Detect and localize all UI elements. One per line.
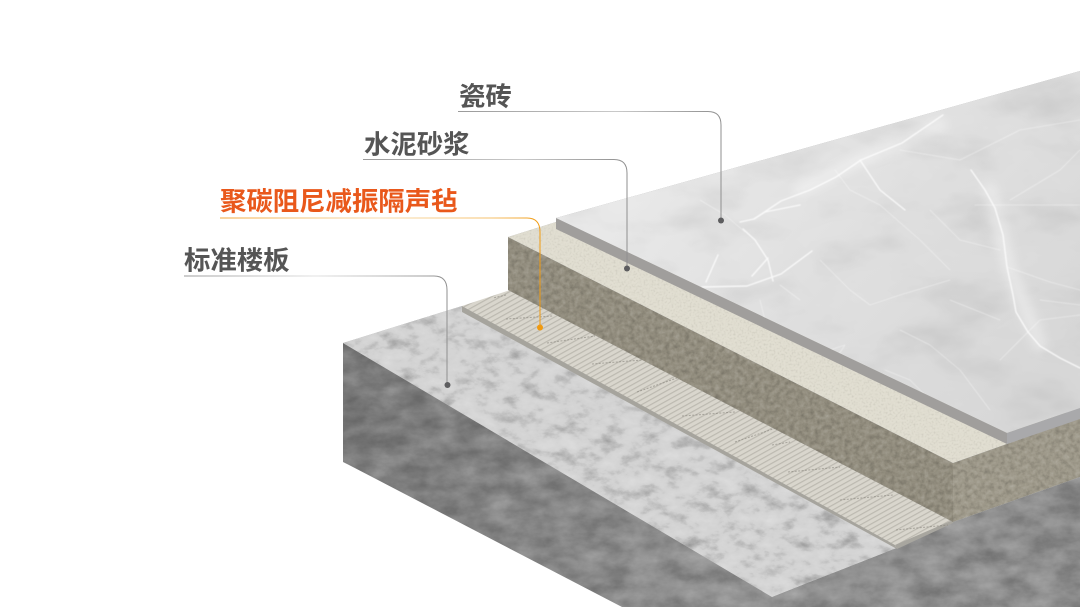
mortar front face (508, 237, 953, 522)
felt printed marks (493, 295, 948, 530)
concrete slab: standard floor (343, 306, 1080, 607)
leader line: standard floor (184, 276, 447, 385)
callout: tile (458, 82, 724, 224)
concrete left face (343, 343, 772, 607)
tile right edge (1007, 408, 1080, 444)
mortar top surface (508, 222, 1080, 463)
felt front edge (462, 306, 897, 549)
label: sound-damping felt: 聚碳阻尼减振隔声毡 (220, 186, 458, 216)
dot: sound-damping felt (537, 324, 543, 330)
leader line: tile (458, 112, 721, 220)
marble veins (700, 115, 1080, 410)
label: tile: 瓷砖 (459, 82, 512, 112)
dot: cement mortar (624, 266, 630, 272)
felt right edge (893, 518, 953, 549)
leader line: sound-damping felt (220, 218, 540, 327)
dot: tile (718, 218, 724, 224)
dot: standard floor (444, 382, 450, 388)
tile marble top (556, 71, 1080, 433)
callout: standard floor (184, 246, 450, 388)
label: standard floor: 标准楼板 (184, 246, 290, 276)
cement mortar layer (508, 222, 1080, 522)
callout: cement mortar (363, 130, 630, 272)
leader line: cement mortar (363, 160, 627, 268)
felt ribbed top (462, 289, 953, 545)
label: cement mortar: 水泥砂浆 (364, 130, 470, 160)
sound-damping felt layer (462, 289, 953, 549)
callout: sound-damping felt (220, 186, 543, 330)
mortar right face (953, 418, 1080, 522)
ceramic tile layer (556, 71, 1080, 444)
concrete right face (772, 477, 1080, 607)
infographic: floor layer build-up (184, 71, 1080, 607)
tile left edge (556, 218, 1007, 444)
concrete top surface (343, 306, 897, 597)
